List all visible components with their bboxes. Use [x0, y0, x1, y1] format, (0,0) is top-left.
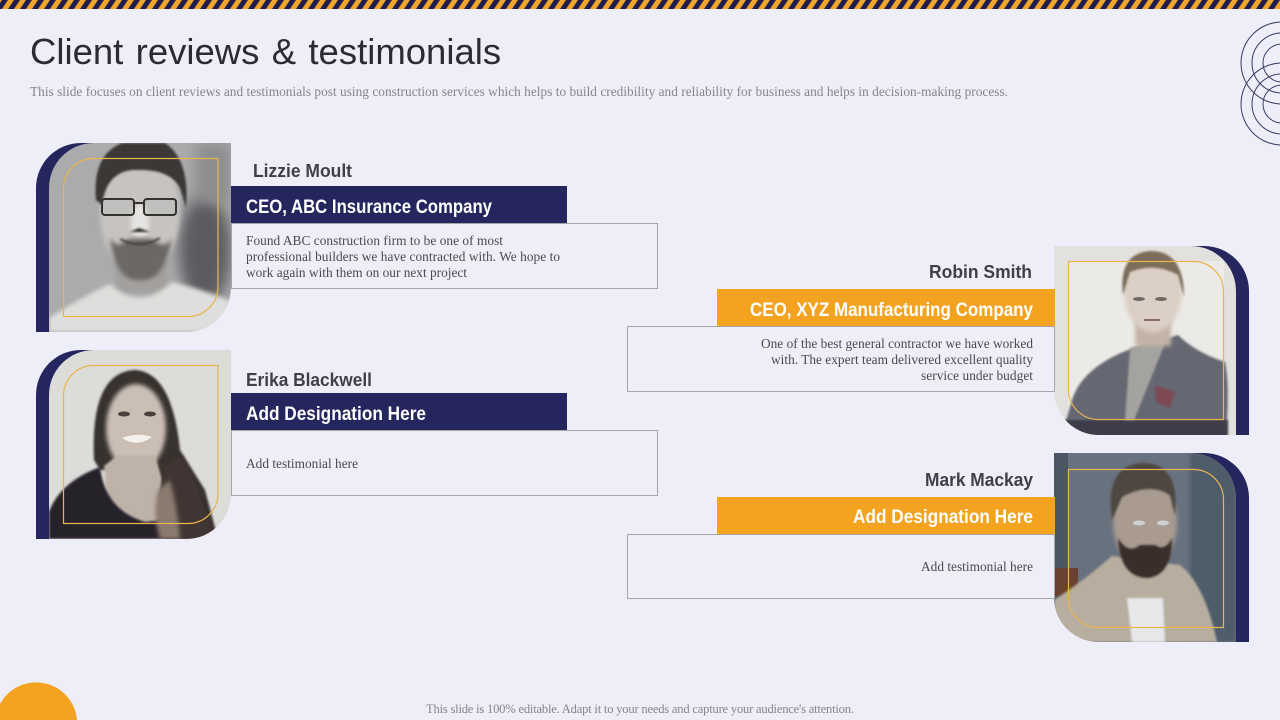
designation bar: CEO, ABC Insurance Company [246, 196, 492, 218]
testimonial: Robin Smith [628, 246, 1249, 440]
icon: portrait of Mark Mackay [1054, 453, 1249, 642]
subtitle: This slide focuses on client reviews and testimonials post using construction services which helps to build credibility and reliability for business and helps in decision-making process. [30, 84, 1008, 99]
name: Robin Smith [929, 262, 1032, 282]
decorative orange circle [0, 682, 77, 720]
testimonial text box: Add testimonial here [246, 456, 358, 471]
designation bar: CEO, XYZ Manufacturing Company [750, 299, 1033, 321]
testimonial text box [628, 534, 1054, 598]
testimonial text box [628, 326, 1054, 392]
footer note: This slide is 100% editable. Adapt it to your needs and capture your audience's attention. [426, 702, 854, 716]
decorative concentric circles [1241, 22, 1280, 145]
name: Erika Blackwell [246, 370, 372, 390]
testimonial text box: with. The expert team delivered excellent quality [771, 352, 1033, 367]
testimonial text box [232, 430, 658, 496]
designation bar: Add Designation Here [246, 403, 426, 425]
designation bar [717, 497, 1055, 534]
testimonial text box [232, 224, 658, 288]
icon: portrait of Lizzie Moult [36, 143, 231, 332]
icon: portrait of Erika Blackwell [36, 350, 231, 539]
hazard stripe top band [0, 0, 1280, 9]
testimonial: Mark Mackay [628, 453, 1249, 642]
icon: portrait of Robin Smith [1054, 246, 1249, 440]
designation bar [231, 186, 567, 223]
testimonial text box: professional builders we have contracted with. We hope to [246, 249, 560, 264]
testimonial text box: Found ABC construction firm to be one of most [246, 233, 503, 248]
name: Lizzie Moult [253, 161, 352, 181]
designation bar: Add Designation Here [853, 506, 1033, 528]
testimonial text box: One of the best general contractor we have worked [761, 336, 1033, 351]
name: Mark Mackay [925, 470, 1033, 490]
title: Client reviews & testimonials [30, 31, 501, 72]
testimonial text box: work again with them on our next project [246, 265, 467, 280]
testimonial text box: Add testimonial here [921, 559, 1033, 574]
designation bar [717, 289, 1055, 326]
designation bar [231, 393, 567, 430]
testimonial: Erika Blackwell [36, 350, 658, 539]
testimonial: Lizzie Moult [36, 143, 658, 332]
testimonial text box: service under budget [921, 368, 1033, 383]
